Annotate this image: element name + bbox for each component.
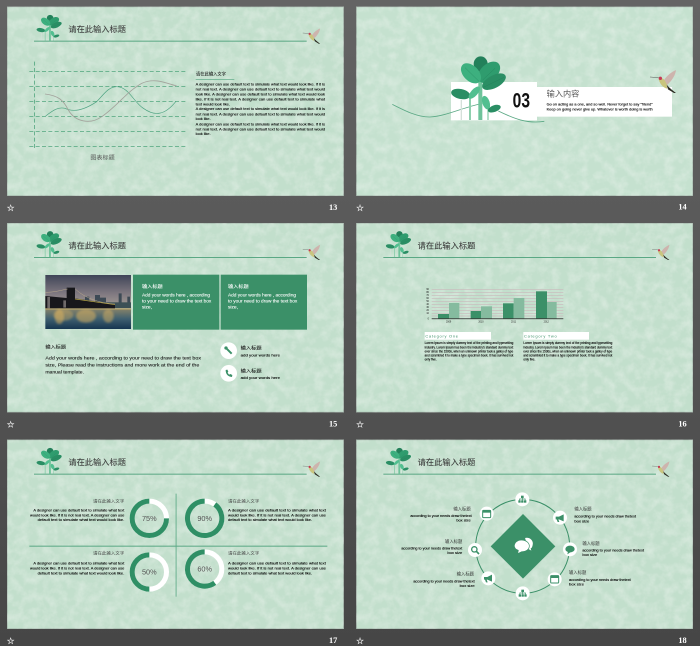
donut 60%: [181, 545, 229, 593]
text block: look like. A designer can use default text to simulate what text would look: [196, 93, 325, 97]
section text: Go on acting as a one, and so well. Never forget to say "friend": [547, 102, 654, 106]
icon node: org chart bottom: [516, 586, 530, 600]
bar chart: 2009: [446, 322, 452, 324]
bar chart: 20: [426, 310, 430, 312]
card 1: Add your words here , according: [142, 293, 211, 298]
bar chart: 60: [426, 298, 430, 300]
text block: not real text. A designer can use default text to simulate what text would: [196, 88, 325, 92]
category one: industry. Lorem Ipsum has been the industry's standard dummy text: [425, 345, 513, 349]
bar chart: [426, 289, 563, 324]
donut 50%: 50%: [142, 568, 157, 577]
bar chart: 80: [426, 292, 430, 294]
section title: 输入内容: [547, 89, 579, 99]
icon: hummingbird: [652, 245, 669, 260]
icon: hummingbird: [303, 28, 320, 44]
icon node: calendar right: [548, 572, 562, 586]
text top left: would look like. If it is not real text. A designer can use: [30, 513, 124, 517]
icon: favourite star: ☆: [356, 420, 364, 430]
label middle left: 输入标题: [445, 538, 463, 545]
bar chart: 40: [426, 304, 430, 306]
slide number: 18: [678, 636, 687, 645]
panel: slide 16 bar chart: [356, 223, 693, 430]
heading: 请在此输入标题: [418, 457, 475, 467]
icon node: org chart top: [515, 492, 529, 506]
category two: Lorem Ipsum is simply dummy text of the printing and typesetting: [523, 341, 613, 345]
donut 50%: [132, 555, 166, 589]
label middle right: 输入标题: [582, 540, 600, 547]
text block: text would look like.: [196, 102, 230, 106]
slide number: 17: [329, 636, 337, 645]
text block: A designer can use default text to simulate what text would look like. If it is: [196, 82, 325, 86]
category two: and scrambled it to make a type specimen book. It has survived not: [523, 354, 612, 358]
label upper left: box size: [456, 519, 471, 523]
label upper right: 输入标题: [574, 506, 592, 513]
label upper right: box size: [574, 519, 590, 523]
text top left: A designer can use default text to simulate what text: [33, 508, 124, 512]
body text block: [45, 344, 202, 375]
category two: [523, 332, 613, 362]
heading: 请在此输入标题: [68, 24, 126, 34]
label middle left: [401, 538, 463, 555]
label upper left: [410, 506, 472, 523]
card 2: Add your words here , according: [228, 293, 297, 298]
header rule: [383, 474, 656, 475]
panel: slide 15 photo and cards: [7, 223, 344, 430]
label lower left: box size: [460, 584, 475, 588]
text bottom right: A designer can use default text to simulate what text: [228, 562, 326, 566]
label lower right: [569, 569, 631, 587]
ring: [476, 499, 570, 593]
bar chart: 90: [426, 289, 430, 291]
card 1: 输入标题: [142, 283, 163, 290]
body text block: size, Please read the instructions and more work at the end of the: [45, 363, 200, 368]
bar chart: 30: [426, 307, 430, 309]
text block: look like.: [196, 132, 211, 136]
label upper left: 输入标题: [453, 506, 471, 513]
category two: industry. Lorem Ipsum has been the industry's standard dummy text: [523, 345, 612, 349]
icon: plant logo: [36, 448, 63, 474]
photo: city bridge at dusk: [45, 275, 131, 329]
text top right: 请在此输入文字: [228, 498, 259, 504]
text top right: default text to simulate what text would look like.: [228, 518, 312, 522]
icon node: magnifier: [468, 543, 482, 557]
slide number: 14: [678, 203, 687, 212]
text block: like. If it is not real text. A designer can use default text to simulate what: [196, 98, 326, 102]
text bottom left: [30, 550, 124, 575]
section number: 03: [513, 89, 530, 113]
label middle right: according to your needs draw thetext: [582, 548, 644, 552]
panel: slide 17 donut charts: [7, 440, 344, 646]
text block: [196, 70, 326, 136]
icon node: chat right: [563, 542, 577, 556]
bar chart: 70: [426, 295, 430, 297]
bar chart: 2010: [478, 322, 484, 324]
panel: slide 14 section divider: [356, 7, 693, 214]
header rule: [383, 257, 656, 258]
line chart: [29, 62, 186, 150]
label upper left: according to your needs draw thetext: [410, 514, 472, 518]
wrench label: 输入标题: [241, 345, 262, 352]
header rule: [34, 40, 307, 43]
text top right: [228, 498, 326, 522]
white number card: [451, 82, 537, 120]
text bottom right: default text to simulate what text would look like.: [228, 571, 312, 575]
card 2: size,: [228, 305, 238, 310]
bar chart: 10: [426, 313, 430, 315]
text top left: [30, 498, 124, 522]
wave line: [392, 104, 544, 122]
label middle left: box size: [447, 551, 463, 555]
text bottom right: 请在此输入文字: [228, 550, 259, 556]
text top left: 请在此输入文字: [93, 498, 124, 504]
wrench label: [241, 345, 280, 357]
label lower right: box size: [569, 583, 584, 587]
text block: look like.: [196, 117, 211, 121]
header rule: [34, 474, 307, 475]
donut 75%: 75%: [142, 514, 157, 523]
text block: A designer can use default text to simulate what text would look like. If it is: [196, 122, 325, 126]
icon: plant logo: [36, 231, 63, 257]
label lower left: according to your needs draw thetext: [413, 579, 475, 583]
category one: Category One: [425, 333, 459, 338]
header rule: [34, 257, 307, 258]
category one: Lorem Ipsum is simply dummy text of the printing and typesetting: [425, 341, 514, 345]
text top left: default text to simulate what text would look like.: [38, 518, 124, 522]
body text block: manual template.: [45, 370, 84, 375]
section text: Keep on going never give up. Whatever is worth doing is worth: [547, 107, 653, 111]
white text card: [537, 87, 672, 117]
card 1: to your need to draw the text box: [142, 299, 212, 304]
category two: Category Two: [524, 333, 557, 338]
label upper right: according to your needs draw thetext: [574, 515, 636, 519]
phone label: add your words here: [241, 376, 280, 380]
category two: only five.: [523, 358, 535, 362]
icon: favourite star: ☆: [356, 204, 364, 214]
bar chart: 2012: [544, 322, 550, 324]
text bottom left: 请在此输入文字: [93, 550, 124, 556]
wrench label: add your words here: [241, 353, 280, 357]
icon: hummingbird: [303, 461, 320, 477]
bar chart: 2011: [511, 322, 517, 324]
category one: [425, 332, 514, 362]
slide number: 15: [329, 419, 337, 428]
slide number: 13: [329, 203, 337, 212]
card 2: [221, 275, 307, 330]
label lower left: 输入标题: [457, 570, 475, 577]
card 1: size,: [142, 305, 152, 310]
donut 75%: [132, 501, 166, 535]
icon: wrench: [220, 342, 237, 359]
text block: A designer can use default text to simulate what text would look like. If it is: [196, 107, 325, 111]
icon node: megaphone left: [481, 571, 495, 585]
bar chart: 0: [428, 318, 430, 320]
card 2: 输入标题: [228, 283, 249, 290]
label upper right: [574, 506, 636, 523]
body text block: Add your words here , according to your need to draw the text box: [45, 356, 202, 361]
category two: ever since the 1500s, when an unknown printer took a galley of type: [523, 349, 613, 353]
donut 90%: [181, 494, 229, 542]
icon: phone: [220, 365, 237, 382]
icon node: megaphone right: [553, 511, 567, 525]
text bottom left: default text to simulate what text would look like.: [38, 571, 124, 575]
phone label: 输入标题: [241, 367, 262, 374]
icon node: calendar left: [480, 507, 494, 521]
icon: favourite star: ☆: [7, 204, 15, 214]
phone label: [241, 367, 280, 380]
icon: plant logo: [385, 231, 412, 257]
icon: hummingbird: [650, 70, 676, 93]
chart caption: 图表标题: [90, 153, 115, 161]
category one: only five.: [425, 358, 437, 362]
text block: not real text. A designer can use default text to simulate what text would: [196, 127, 325, 131]
card 1: [133, 275, 219, 330]
category one: ever since the 1500s, when an unknown printer took a galley of type: [425, 349, 514, 353]
heading: 请在此输入标题: [68, 457, 126, 467]
heading: 请在此输入标题: [418, 240, 475, 250]
panel: slide 13 line chart: [7, 7, 344, 214]
text top right: A designer can use default text to simulate what text: [228, 508, 326, 512]
label lower right: 输入标题: [569, 569, 587, 576]
text bottom right: would look like. If it is not real text. A designer can use: [228, 567, 326, 571]
label middle right: [582, 540, 644, 557]
quadrant divider horizontal: [29, 546, 327, 547]
icon: hummingbird: [303, 245, 320, 260]
icon: hummingbird: [652, 461, 669, 477]
icon: favourite star: ☆: [7, 420, 15, 430]
body text block: 输入标题: [45, 344, 67, 351]
text bottom left: A designer can use default text to simulate what text: [33, 562, 124, 566]
icon: large plant: [450, 56, 508, 120]
text block: 请在此输入文字: [196, 70, 227, 77]
bar chart: 50: [426, 301, 430, 303]
section text: [547, 102, 654, 111]
donut 90%: 90%: [197, 514, 212, 523]
slide number: 16: [678, 419, 687, 428]
heading: 请在此输入标题: [68, 240, 126, 250]
text block: not real text. A designer can use default text to simulate what text would: [196, 112, 325, 116]
label lower left: [413, 570, 475, 588]
icon: plant logo: [36, 15, 63, 41]
text top right: would look like. If it is not real text. A designer can use: [228, 513, 326, 517]
card 2: to your need to draw the text box: [228, 299, 298, 304]
label lower right: according to your needs draw thetext: [569, 578, 631, 582]
icon: plant logo: [385, 448, 412, 474]
centre diamond with speech bubbles: [491, 514, 555, 579]
category one: and scrambled it to make a type specimen book. It has survived not: [425, 354, 513, 358]
label middle right: box size: [582, 553, 598, 557]
text bottom right: [228, 550, 326, 575]
panel: slide 18 circular diagram: [356, 440, 693, 646]
quadrant divider vertical: [175, 494, 177, 597]
donut 60%: 60%: [197, 565, 212, 574]
label middle left: according to your needs draw thetext: [401, 546, 462, 550]
text bottom left: would look like. If it is not real text. A designer can use: [30, 567, 124, 571]
